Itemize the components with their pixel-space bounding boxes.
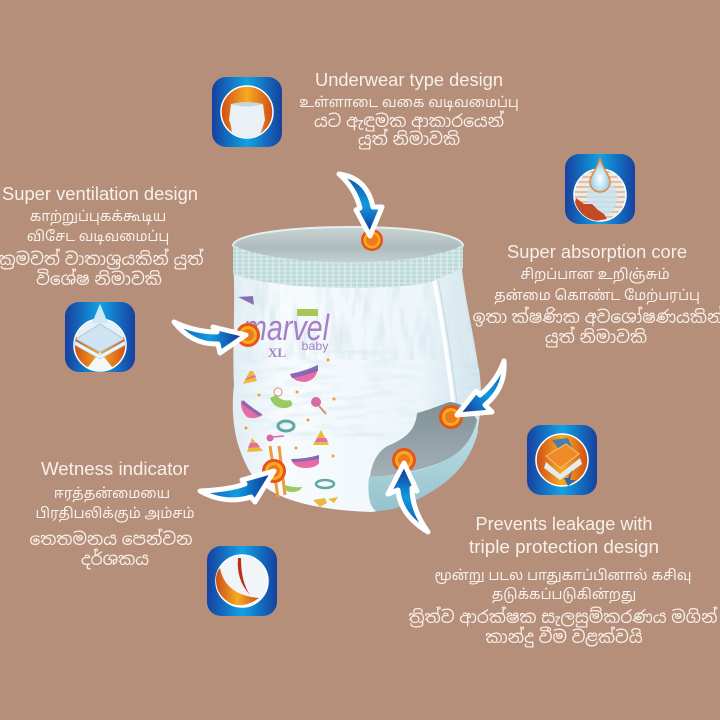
text block: underwear type design: Underwear type design xyxy=(315,70,503,90)
text block: prevents leakage xyxy=(409,514,718,648)
fabric wrinkle texture xyxy=(228,270,484,440)
icon: ventilation layers xyxy=(65,302,135,372)
text block: underwear type design xyxy=(299,70,519,149)
leg cuff xyxy=(368,420,478,511)
leg opening xyxy=(370,402,477,477)
text block: prevents leakage: ත්‍රිත්ව ආරක්ෂක සැලසුම්කරණය මගින් xyxy=(409,606,718,628)
text block: underwear type design: යට ඇඳුමක ආකාරයෙන් xyxy=(314,110,505,131)
marker: waist xyxy=(361,229,383,251)
diaper waist interior xyxy=(233,227,463,265)
icon: triple protection layers xyxy=(527,425,597,495)
text block: super absorption core: ඉතා ක්ෂණික අවශෝෂණයකින් xyxy=(473,306,720,328)
text block: prevents leakage: Prevents leakage with xyxy=(476,514,652,534)
marker: wetness xyxy=(262,459,286,483)
text block: super ventilation design xyxy=(0,184,204,289)
text block: super absorption core: Super absorption core xyxy=(507,242,687,262)
text block: super absorption core: தன்மை கொண்ட மேற்பரப்பு xyxy=(494,287,700,305)
text block: super ventilation design: ක්‍රමවත් වාතාශ්‍රයකින් යුත් xyxy=(0,248,204,269)
brand logo: XL xyxy=(268,345,286,360)
text block: underwear type design: යුත් නිමාවකි xyxy=(358,128,460,149)
arrow: absorption xyxy=(457,361,504,415)
text block: prevents leakage: triple protection design xyxy=(469,537,659,557)
text block: wetness indicator: ஈரத்தன்மையை xyxy=(54,485,170,503)
brand logo xyxy=(243,307,330,360)
icon: absorption droplet xyxy=(565,154,635,224)
product: diaper pants xyxy=(228,227,484,512)
text block: super absorption core xyxy=(473,242,720,347)
brand logo: baby xyxy=(302,339,328,353)
text block: super absorption core: சிறப்பான உறிஞ்சும் xyxy=(520,266,670,284)
marker: leak guard xyxy=(392,448,416,472)
text block: super ventilation design: விசேட வடிவமைப்பு xyxy=(27,228,169,245)
text block: wetness indicator xyxy=(29,459,194,569)
icon: underwear xyxy=(212,77,282,147)
text block: wetness indicator: තෙතමනය පෙන්වන xyxy=(29,528,193,549)
brand logo: marvel xyxy=(243,307,330,348)
text block: wetness indicator: Wetness indicator xyxy=(41,459,189,479)
marker: side vent xyxy=(236,323,260,347)
arrow: leakage xyxy=(388,463,428,532)
text block: prevents leakage: தடுக்கப்படுகின்றது xyxy=(492,586,636,604)
elastic waistband xyxy=(233,245,463,288)
arrow: wetness xyxy=(200,471,274,502)
text block: underwear type design: உள்ளாடை வகை வடிவமைப்பு xyxy=(299,94,519,111)
text block: wetness indicator: பிரதிபலிக்கும் அம்சம் xyxy=(36,505,194,523)
marker: absorption xyxy=(439,405,463,429)
diaper body xyxy=(233,245,481,512)
arrow: underwear design xyxy=(339,174,382,236)
text block: super ventilation design: විශේෂ නිමාවකි xyxy=(36,268,162,289)
text block: super absorption core: යුත් නිමාවකි xyxy=(545,326,647,347)
text block: wetness indicator: දර්ශකය xyxy=(81,548,149,569)
text block: prevents leakage: மூன்று படல பாதுகாப்பினால் கசிவு xyxy=(435,567,691,585)
printed baby motifs xyxy=(238,296,338,507)
text block: super ventilation design: Super ventilation design xyxy=(2,184,198,204)
icon: wetness indicator xyxy=(207,546,277,616)
arrow: ventilation xyxy=(174,322,246,353)
text block: prevents leakage: කාන්දු වීම වළක්වයි xyxy=(485,626,643,648)
text block: super ventilation design: காற்றுப்புகக்கூடிய xyxy=(30,208,166,226)
